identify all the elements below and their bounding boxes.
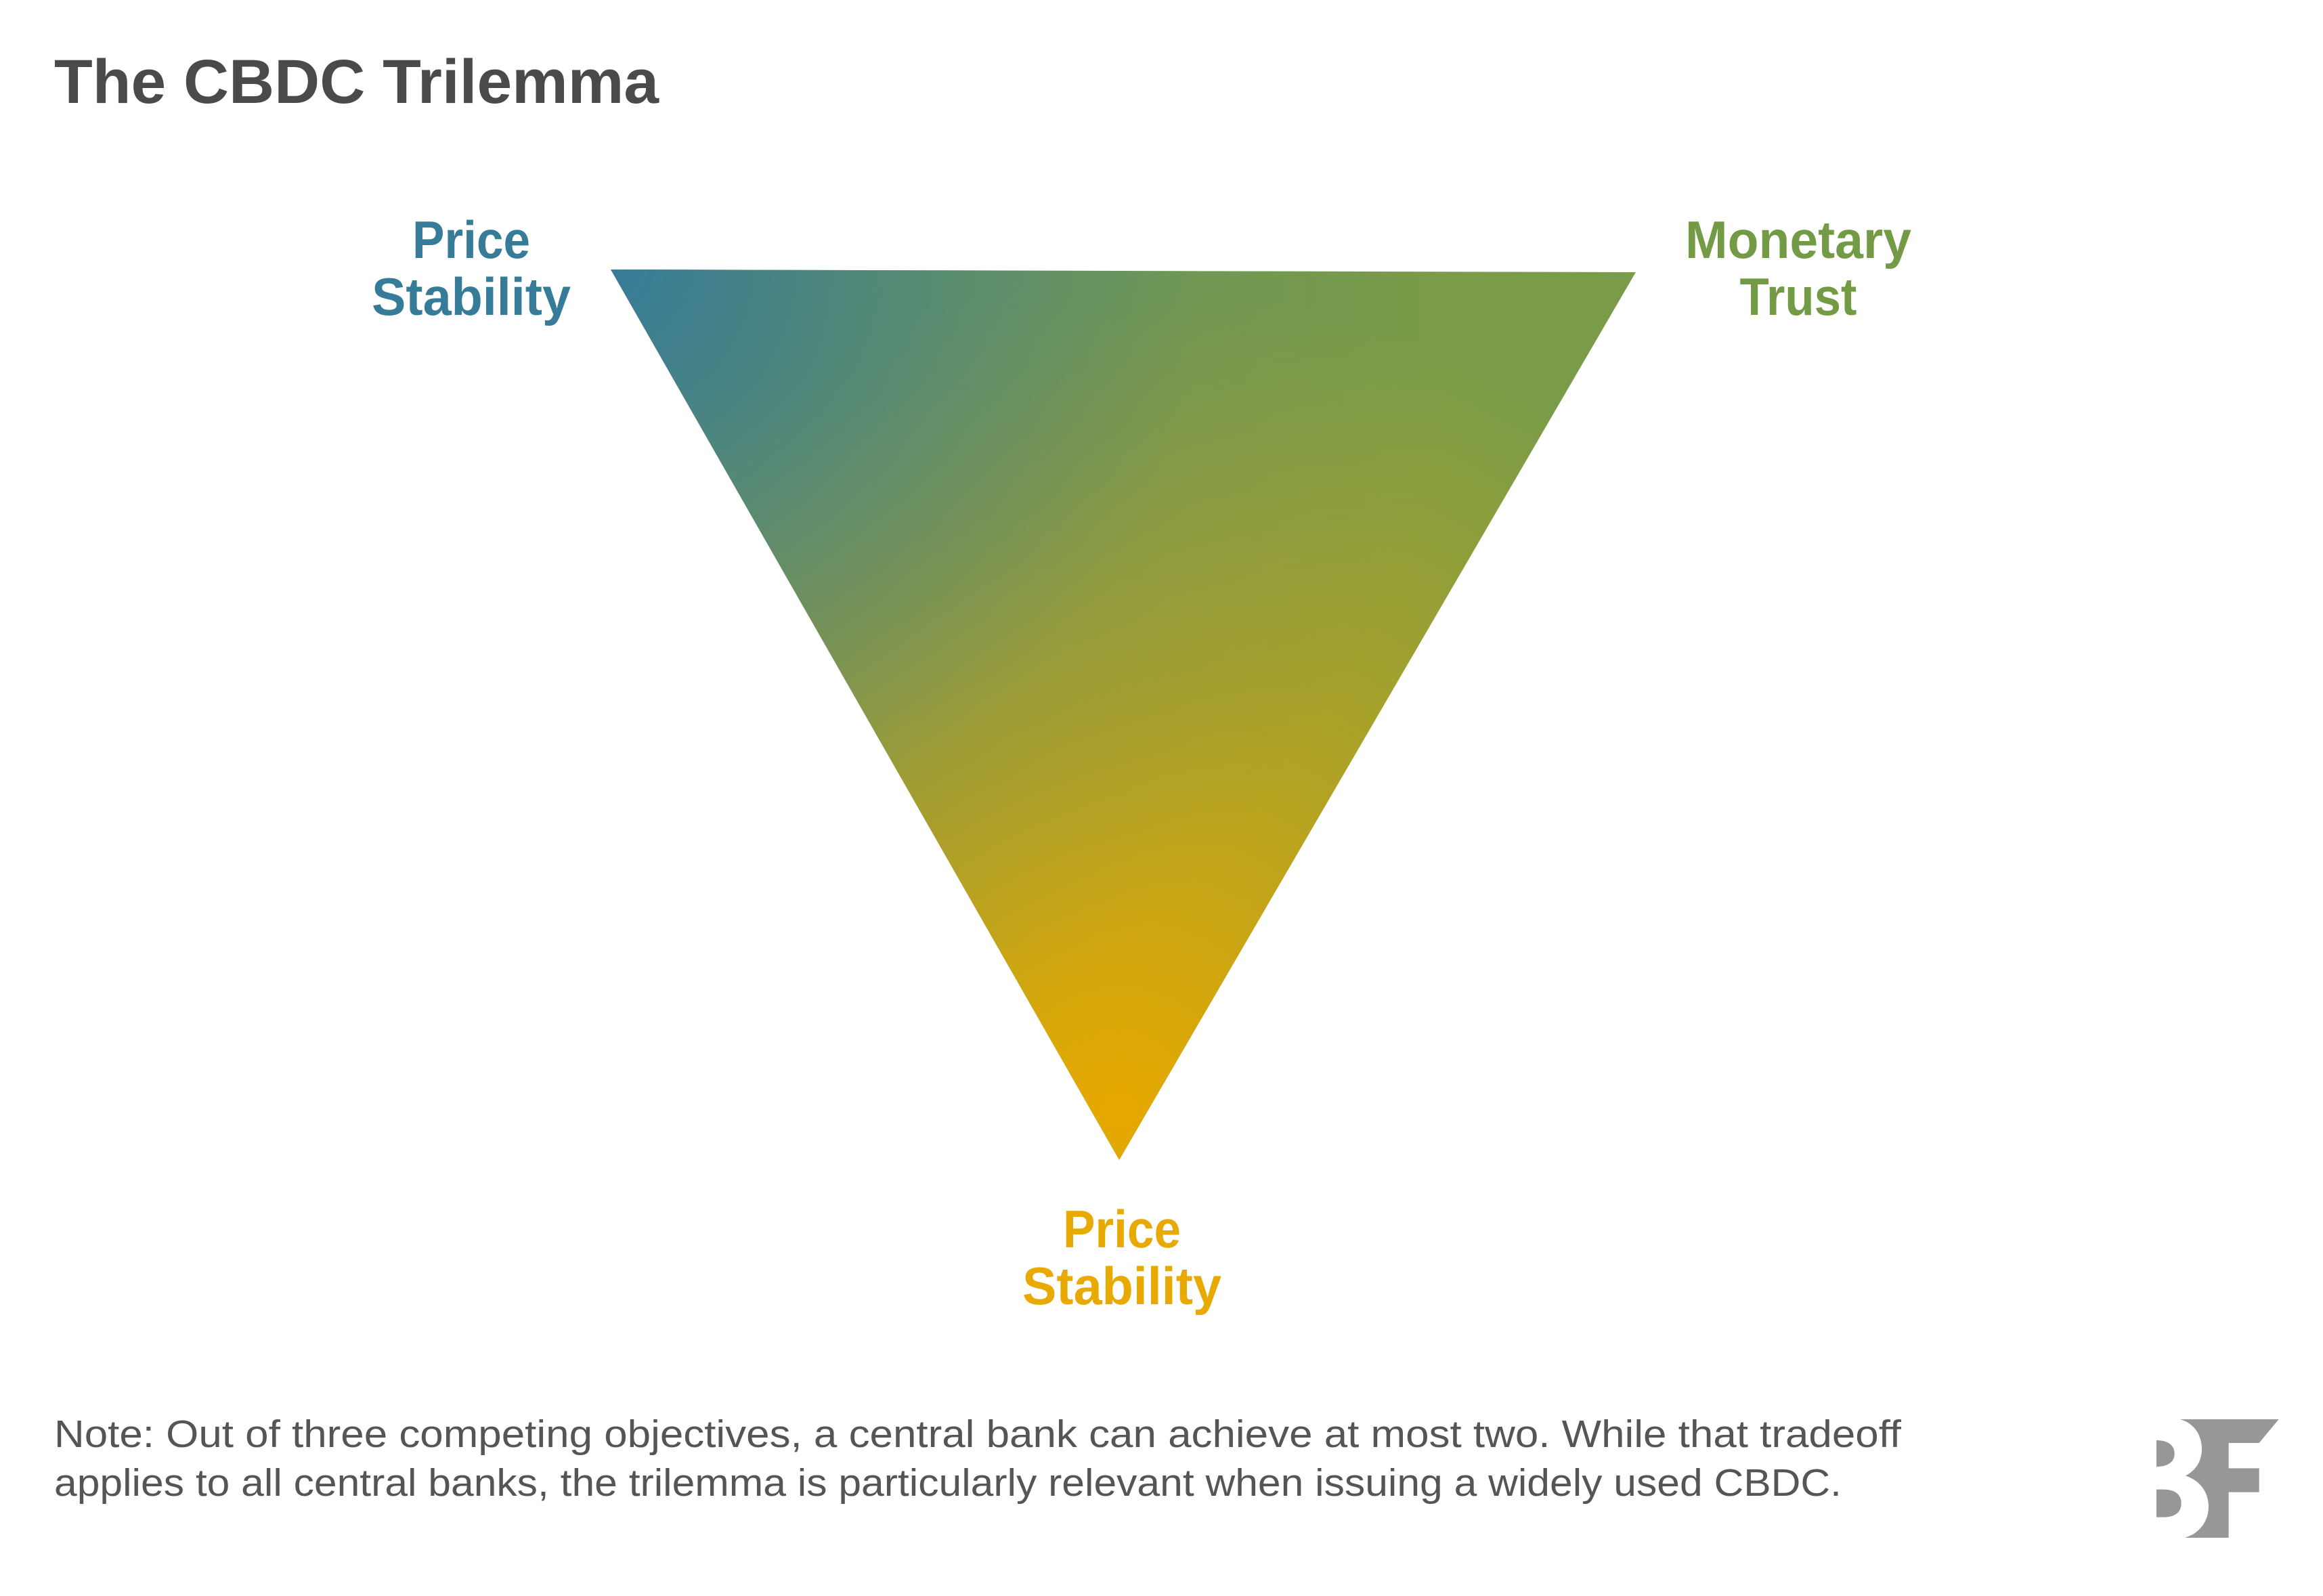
icon: BF logo — [2156, 1419, 2279, 1538]
label: top-left vertex: Stability — [372, 267, 571, 326]
note text: applies to all central banks, the trilemma is particularly relevant when issuing a widely used CBDC. — [54, 1461, 1842, 1505]
label: top-left vertex: Price — [412, 210, 530, 269]
label: top-right vertex: Trust — [1740, 267, 1857, 326]
label: bottom vertex — [1022, 1199, 1221, 1316]
note text: Note: Out of three competing objectives, a central bank can achieve at most two. While that tradeoff — [54, 1412, 1901, 1456]
label: bottom vertex: Stability — [1022, 1256, 1221, 1316]
note text — [54, 1412, 1901, 1505]
label: top-left vertex — [372, 210, 571, 326]
title: The CBDC Trilemma — [54, 47, 659, 116]
label: bottom vertex: Price — [1063, 1199, 1181, 1259]
label: top-right vertex: Monetary — [1685, 210, 1911, 269]
label: top-right vertex — [1685, 210, 1911, 326]
trilemma triangle — [611, 269, 1636, 1160]
